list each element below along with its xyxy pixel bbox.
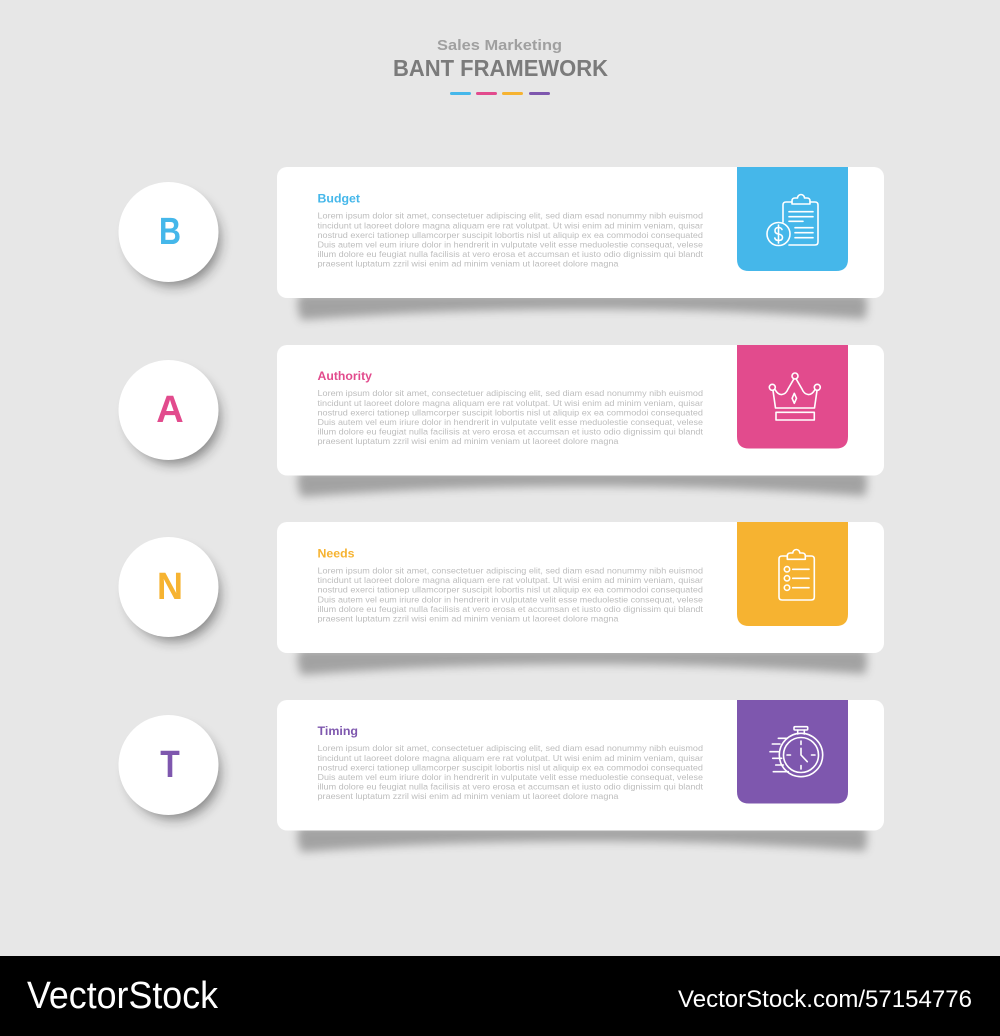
body text: praesent luptatum zzril wisi enim ad minim veniam ut laoreet dolore magna bbox=[318, 436, 619, 446]
body text: Lorem ipsum dolor sit amet, consectetuer adipiscing elit, sed diam esad nonummy nibh euismod bbox=[318, 743, 703, 753]
circle shadow bbox=[128, 194, 220, 286]
body text bbox=[318, 211, 704, 269]
icon: checklist clipboard bbox=[779, 550, 814, 600]
footer bar bbox=[0, 956, 1000, 1036]
body text: Duis autem vel eum iriure dolor in hendrerit in vulputate velit esse meduolestie consequat, velese bbox=[318, 417, 703, 427]
footer brand: VectorStock bbox=[27, 975, 219, 1017]
card shadow bbox=[298, 649, 867, 675]
body text bbox=[318, 388, 704, 446]
body text: praesent luptatum zzril wisi enim ad minim veniam ut laoreet dolore magna bbox=[318, 614, 619, 624]
badge circle T bbox=[118, 715, 218, 815]
body text: tincidunt ut laoreet dolore magna aliquam ere rat volutpat. Ut wisi enim ad minim veniam, quisar bbox=[318, 575, 703, 585]
body text: tincidunt ut laoreet dolore magna aliquam ere rat volutpat. Ut wisi enim ad minim veniam, quisar bbox=[318, 753, 703, 763]
badge circle A bbox=[118, 360, 218, 460]
colored tab bbox=[737, 345, 848, 448]
heading: Authority: Authority bbox=[318, 371, 373, 383]
circle shadow bbox=[128, 372, 220, 464]
icon: clipboard with dollar coin bbox=[767, 194, 818, 246]
letter A: A bbox=[156, 389, 184, 431]
body text: Lorem ipsum dolor sit amet, consectetuer adipiscing elit, sed diam esad nonummy nibh euismod bbox=[318, 211, 703, 221]
body text: illum dolore eu feugiat nulla facilisis at vero erosa et accumsan et iusto odio dignissim qui blandt bbox=[318, 249, 704, 259]
body text: illum dolore eu feugiat nulla facilisis at vero erosa et accumsan et iusto odio dignissim qui blandt bbox=[318, 604, 704, 614]
card shadow bbox=[298, 471, 867, 497]
body text bbox=[318, 743, 704, 801]
card shadow bbox=[298, 826, 867, 852]
panel: Timing row bbox=[118, 700, 884, 852]
body text: illum dolore eu feugiat nulla facilisis at vero erosa et accumsan et iusto odio dignissim qui blandt bbox=[318, 427, 704, 437]
body text bbox=[318, 566, 704, 624]
body text: Duis autem vel eum iriure dolor in hendrerit in vulputate velit esse meduolestie consequat, velese bbox=[318, 594, 703, 604]
subtitle: Sales Marketing bbox=[437, 37, 562, 54]
letter N: N bbox=[157, 566, 183, 608]
circle shadow bbox=[128, 727, 220, 819]
body text: nostrud exerci tationep ullamcorper suscipit lobortis nisl ut aliquip ex ea commodoi consequated bbox=[318, 585, 703, 595]
card bbox=[277, 167, 884, 298]
body text: Duis autem vel eum iriure dolor in hendrerit in vulputate velit esse meduolestie consequat, velese bbox=[318, 240, 703, 250]
colored tab bbox=[737, 167, 848, 271]
footer url: VectorStock.com/57154776 bbox=[678, 986, 972, 1013]
main title: BANT FRAMEWORK bbox=[393, 55, 608, 81]
body text: nostrud exerci tationep ullamcorper suscipit lobortis nisl ut aliquip ex ea commodoi consequated bbox=[318, 407, 703, 417]
heading: Timing: Timing bbox=[318, 726, 358, 738]
body text: tincidunt ut laoreet dolore magna aliquam ere rat volutpat. Ut wisi enim ad minim veniam, quisar bbox=[318, 398, 703, 408]
colored title dashes bbox=[450, 92, 550, 95]
icon: stopwatch bbox=[770, 727, 823, 777]
body text: Duis autem vel eum iriure dolor in hendrerit in vulputate velit esse meduolestie consequat, velese bbox=[318, 772, 703, 782]
title block bbox=[393, 37, 608, 95]
body text: tincidunt ut laoreet dolore magna aliquam ere rat volutpat. Ut wisi enim ad minim veniam, quisar bbox=[318, 220, 703, 230]
icon: crown bbox=[769, 373, 820, 420]
body text: nostrud exerci tationep ullamcorper suscipit lobortis nisl ut aliquip ex ea commodoi consequated bbox=[318, 762, 703, 772]
panel: Authority row bbox=[118, 345, 884, 497]
panel: Needs row bbox=[118, 522, 884, 675]
card bbox=[277, 700, 884, 830]
colored tab bbox=[737, 522, 848, 626]
panel: Budget row bbox=[118, 167, 884, 320]
card bbox=[277, 522, 884, 653]
body text: nostrud exerci tationep ullamcorper suscipit lobortis nisl ut aliquip ex ea commodoi consequated bbox=[318, 230, 703, 240]
body text: Lorem ipsum dolor sit amet, consectetuer adipiscing elit, sed diam esad nonummy nibh euismod bbox=[318, 566, 703, 576]
letter T: T bbox=[160, 744, 180, 786]
badge circle N bbox=[118, 537, 218, 637]
body text: illum dolore eu feugiat nulla facilisis at vero erosa et accumsan et iusto odio dignissim qui blandt bbox=[318, 782, 704, 792]
card bbox=[277, 345, 884, 476]
heading: Budget: Budget bbox=[318, 194, 360, 206]
letter B: B bbox=[159, 211, 181, 253]
badge circle B bbox=[118, 182, 218, 282]
colored tab bbox=[737, 700, 848, 804]
body text: praesent luptatum zzril wisi enim ad minim veniam ut laoreet dolore magna bbox=[318, 259, 619, 269]
body text: praesent luptatum zzril wisi enim ad minim veniam ut laoreet dolore magna bbox=[318, 791, 619, 801]
body text: Lorem ipsum dolor sit amet, consectetuer adipiscing elit, sed diam esad nonummy nibh euismod bbox=[318, 388, 703, 398]
circle shadow bbox=[128, 549, 220, 641]
heading: Needs: Needs bbox=[318, 548, 354, 560]
card shadow bbox=[298, 294, 867, 320]
